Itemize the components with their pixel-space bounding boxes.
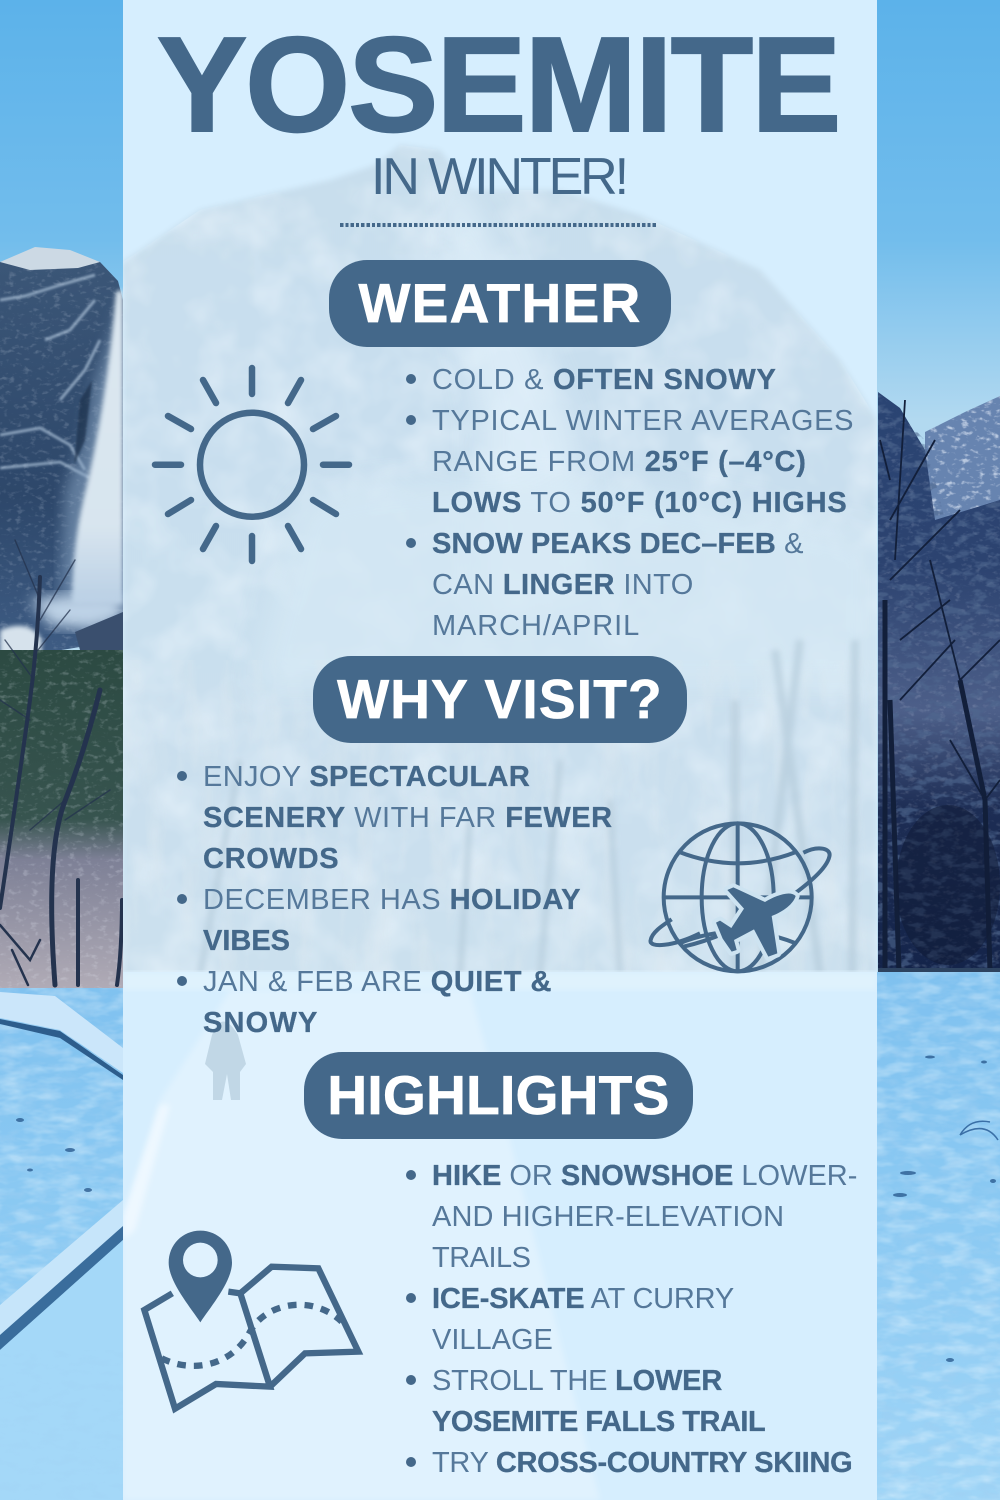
text: reasons to visit: DECEMBER HAS HOLIDAY [203,884,581,916]
text: highlights list [406,1160,857,1478]
text: weather facts: LOWS TO 50°F (10°C) HIGHS [432,486,847,518]
text: weather facts: COLD & OFTEN SNOWY [432,364,777,396]
snow ground [0,972,1000,1500]
subtitle: IN WINTER! [371,148,626,206]
text: reasons to visit: ENJOY SPECTACULAR [203,760,530,792]
text: highlights list: AND HIGHER-ELEVATION [432,1200,784,1232]
text: reasons to visit [177,760,613,1038]
heading: highlights: HIGHLIGHTS [327,1064,670,1126]
text: highlights list: ICE-SKATE AT CURRY [432,1282,734,1314]
left cliff [0,250,123,660]
text: highlights list: TRY CROSS-COUNTRY SKIING [432,1446,852,1478]
text: highlights list: HIKE OR SNOWSHOE LOWER- [432,1160,857,1192]
text: weather facts [406,364,854,642]
text: reasons to visit: CROWDS [203,842,339,874]
right trees [925,396,1000,560]
dotted divider [340,223,657,227]
text: weather facts: SNOW PEAKS DEC–FEB & [432,528,804,560]
text: highlights list: TRAILS [432,1242,531,1274]
text: reasons to visit: JAN & FEB ARE QUIET & [203,966,552,998]
icon: map with pin [140,1230,364,1414]
text: reasons to visit: SNOWY [203,1006,319,1038]
icon: sun [152,364,352,564]
text: reasons to visit: VIBES [203,924,290,956]
heading: why visit [313,656,687,743]
left lower trees [0,650,123,988]
heading: weather [329,260,671,347]
waterfall [72,290,123,604]
heading: highlights [304,1052,693,1139]
text: highlights list: YOSEMITE FALLS TRAIL [432,1406,765,1438]
text: highlights list: STROLL THE LOWER [432,1364,722,1396]
heading: why visit: WHY VISIT? [337,668,663,730]
icon part: plane [716,887,796,957]
text: weather facts: RANGE FROM 25°F (–4°C) [432,446,807,478]
icon: globe with plane [648,821,832,974]
translucent centre panel [123,0,877,1500]
text: highlights list: VILLAGE [432,1324,553,1356]
text: weather facts: TYPICAL WINTER AVERAGES [432,404,854,436]
boardwalks [0,992,123,1073]
text: weather facts: MARCH/APRIL [432,610,640,642]
text: weather facts: CAN LINGER INTO [432,568,694,600]
person [205,1022,246,1100]
title: YOSEMITE [157,9,839,160]
text: reasons to visit: SCENERY WITH FAR FEWER [203,802,613,834]
heading: weather: WEATHER [358,272,642,334]
ground behind panel [123,972,877,1500]
